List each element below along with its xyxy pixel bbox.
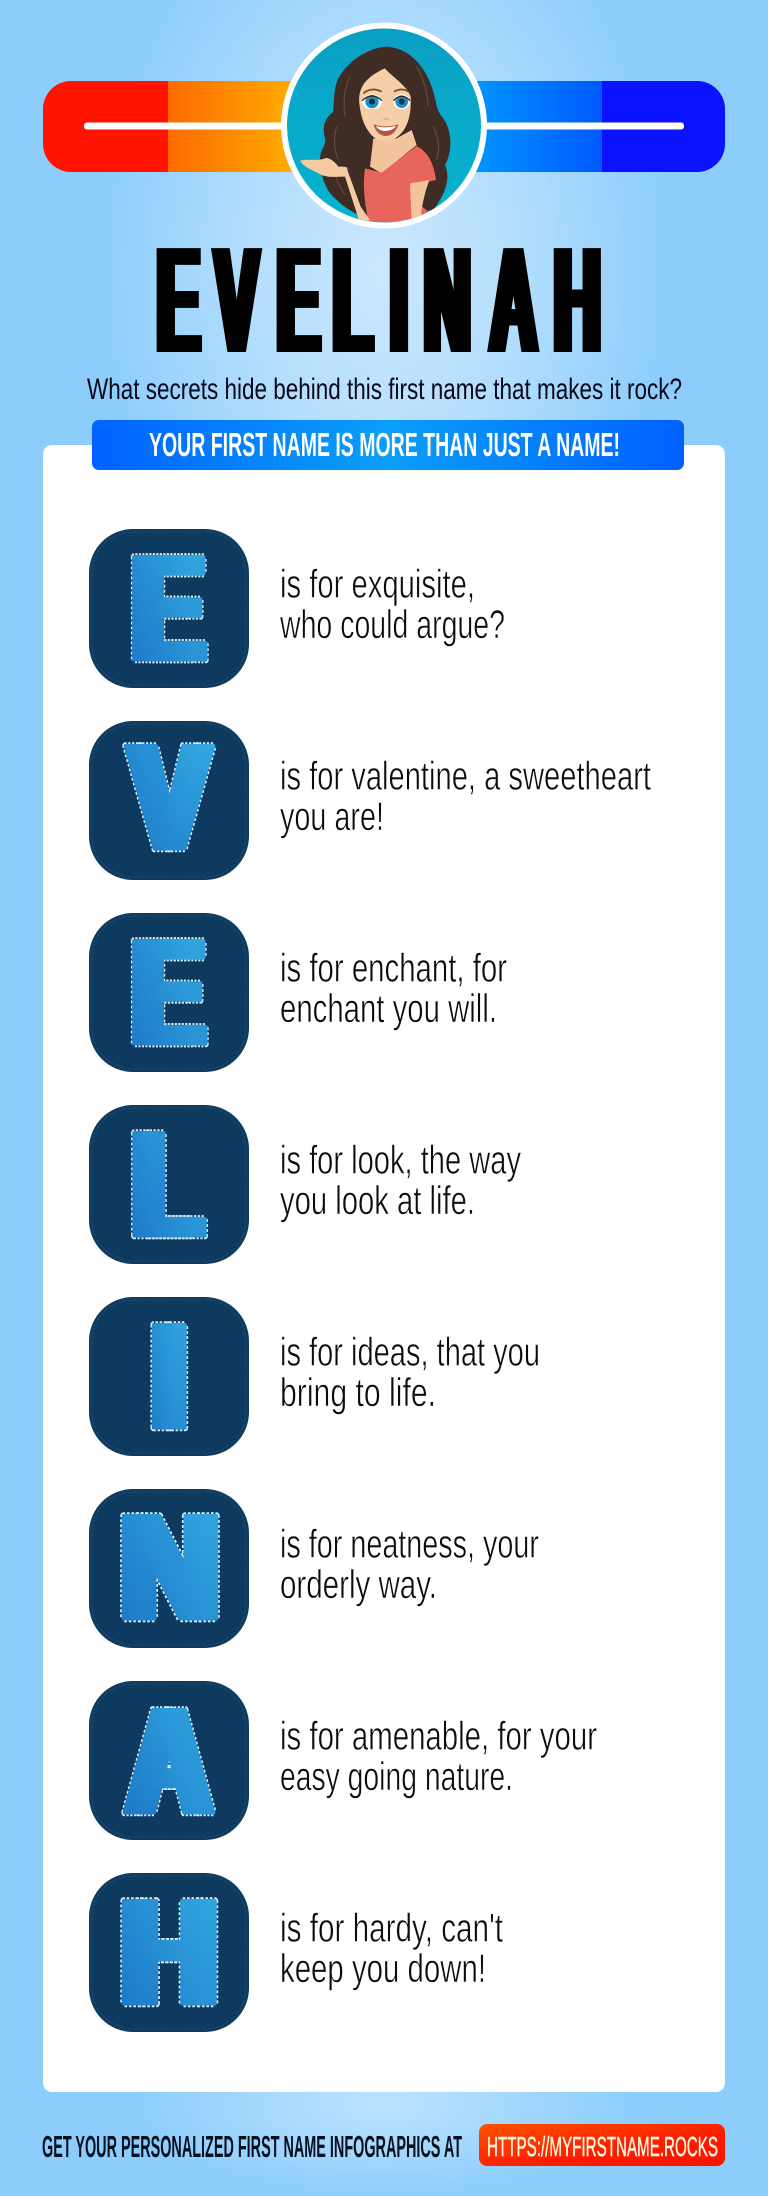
text: V line: you are!: [280, 795, 384, 839]
text: A line: easy going nature.: [280, 1755, 513, 1799]
icon: letter L: L: [133, 1101, 202, 1267]
text: A line: [280, 1714, 597, 1799]
text: L line: [280, 1138, 521, 1223]
header colour bar: [43, 81, 725, 172]
title: EVELINAH: [157, 216, 601, 384]
icon: letter I: I: [152, 1293, 186, 1459]
icon: letter N: [89, 1485, 249, 1651]
text: L line: is for look, the way: [280, 1138, 521, 1182]
icon: letter A: A: [128, 1677, 210, 1844]
icon: letter H: H: [122, 1869, 217, 2035]
icon: letter L: L: [133, 1101, 202, 1267]
icon: letter H: [89, 1869, 249, 2035]
text: H line: [280, 1906, 503, 1991]
icon: letter N: N: [122, 1485, 218, 1651]
footer url button: [479, 2124, 725, 2166]
icon: letter L: [89, 1101, 249, 1267]
icon: letter I: [89, 1293, 249, 1459]
text: V line: [280, 754, 651, 839]
row: V: [89, 715, 651, 881]
icon: letter H: H: [122, 1869, 217, 2035]
icon: letter E: E: [134, 910, 203, 1076]
icon: letter I: I: [152, 1293, 186, 1459]
text: E line: enchant you will.: [280, 987, 497, 1031]
icon: letter E: [89, 910, 249, 1076]
text: N line: is for neatness, your: [280, 1522, 539, 1566]
row: L: [89, 1101, 521, 1267]
text: E line: who could argue?: [279, 603, 505, 647]
icon: letter E: E: [134, 910, 203, 1076]
icon: letter N: N: [122, 1485, 218, 1651]
avatar: cartoon woman in circle: [281, 22, 487, 230]
icon: letter E: [89, 526, 249, 692]
icon: letter V: V: [131, 715, 208, 881]
text: H line: keep you down!: [280, 1947, 486, 1991]
icon: letter A: A: [128, 1677, 210, 1844]
text: E line: is for exquisite,: [280, 562, 475, 606]
row: H: [89, 1869, 503, 2035]
text: A line: is for amenable, for your: [280, 1714, 597, 1758]
row: E: [89, 910, 507, 1076]
row: I: [89, 1293, 540, 1459]
icon: letter A: [89, 1677, 249, 1844]
text: E line: [280, 946, 507, 1031]
row: N: [89, 1485, 539, 1651]
icon: letter V: V: [131, 715, 208, 881]
white content panel: [43, 445, 725, 2092]
icon: letter V: [89, 715, 249, 881]
banner: [92, 420, 684, 470]
row: E: [89, 526, 505, 692]
text: L line: you look at life.: [280, 1179, 475, 1223]
text: I line: [280, 1330, 540, 1415]
text: N line: [280, 1522, 539, 1607]
text: N line: orderly way.: [280, 1563, 437, 1607]
row: A: [89, 1677, 597, 1844]
text: E line: [279, 562, 505, 647]
text: I line: bring to life.: [280, 1371, 436, 1415]
text: I line: is for ideas, that you: [280, 1330, 540, 1374]
icon: letter E: E: [134, 526, 203, 692]
text: E line: is for enchant, for: [280, 946, 507, 990]
text: H line: is for hardy, can't: [280, 1906, 503, 1950]
icon: letter E: E: [134, 526, 203, 692]
